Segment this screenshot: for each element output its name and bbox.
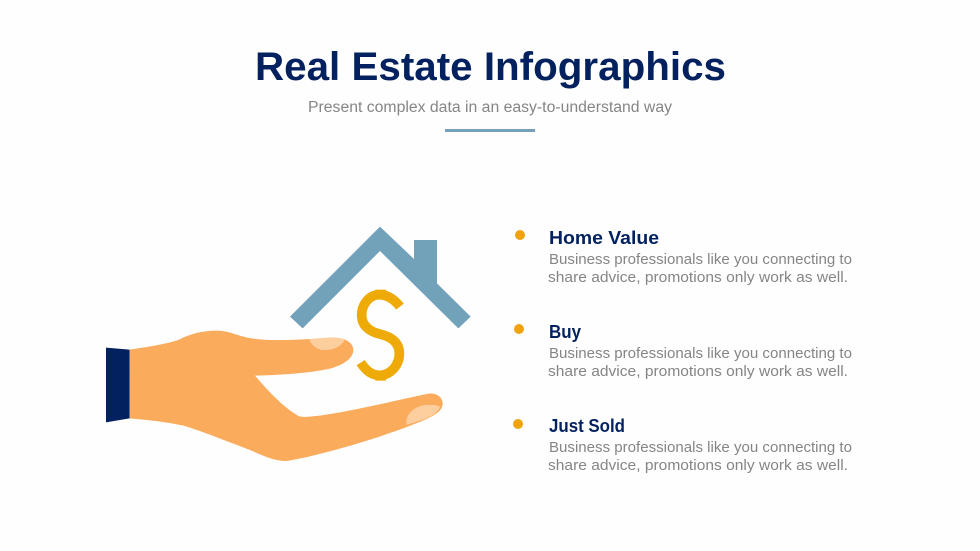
bullet [515,230,525,240]
icon: house roof [290,227,471,328]
title underline [445,129,535,132]
description: Business professionals like you connecting to [549,439,852,456]
list item: Just Sold [513,415,852,474]
bullet [513,419,523,429]
icon: shirt cuff [106,348,130,422]
icon: dollar sign [361,290,400,381]
list item: Buy [514,321,852,380]
description: share advice, promotions only work as well. [548,363,848,380]
title: Real Estate Infographics [255,45,726,89]
bullet [514,324,524,334]
icon: open hand [130,331,443,461]
description: share advice, promotions only work as well. [548,457,848,474]
heading: Buy [549,321,582,342]
description: Business professionals like you connecting to [549,345,852,362]
list item: Home Value [515,227,852,286]
heading: Just Sold [549,415,625,436]
description: share advice, promotions only work as well. [548,269,848,286]
icon: thumb fingernail [406,405,440,425]
illustration: hand holding house [106,227,471,461]
subtitle: Present complex data in an easy-to-understand way [308,99,672,116]
heading: Home Value [549,227,659,248]
description: Business professionals like you connecting to [549,251,852,268]
icon: index fingernail [309,338,345,350]
